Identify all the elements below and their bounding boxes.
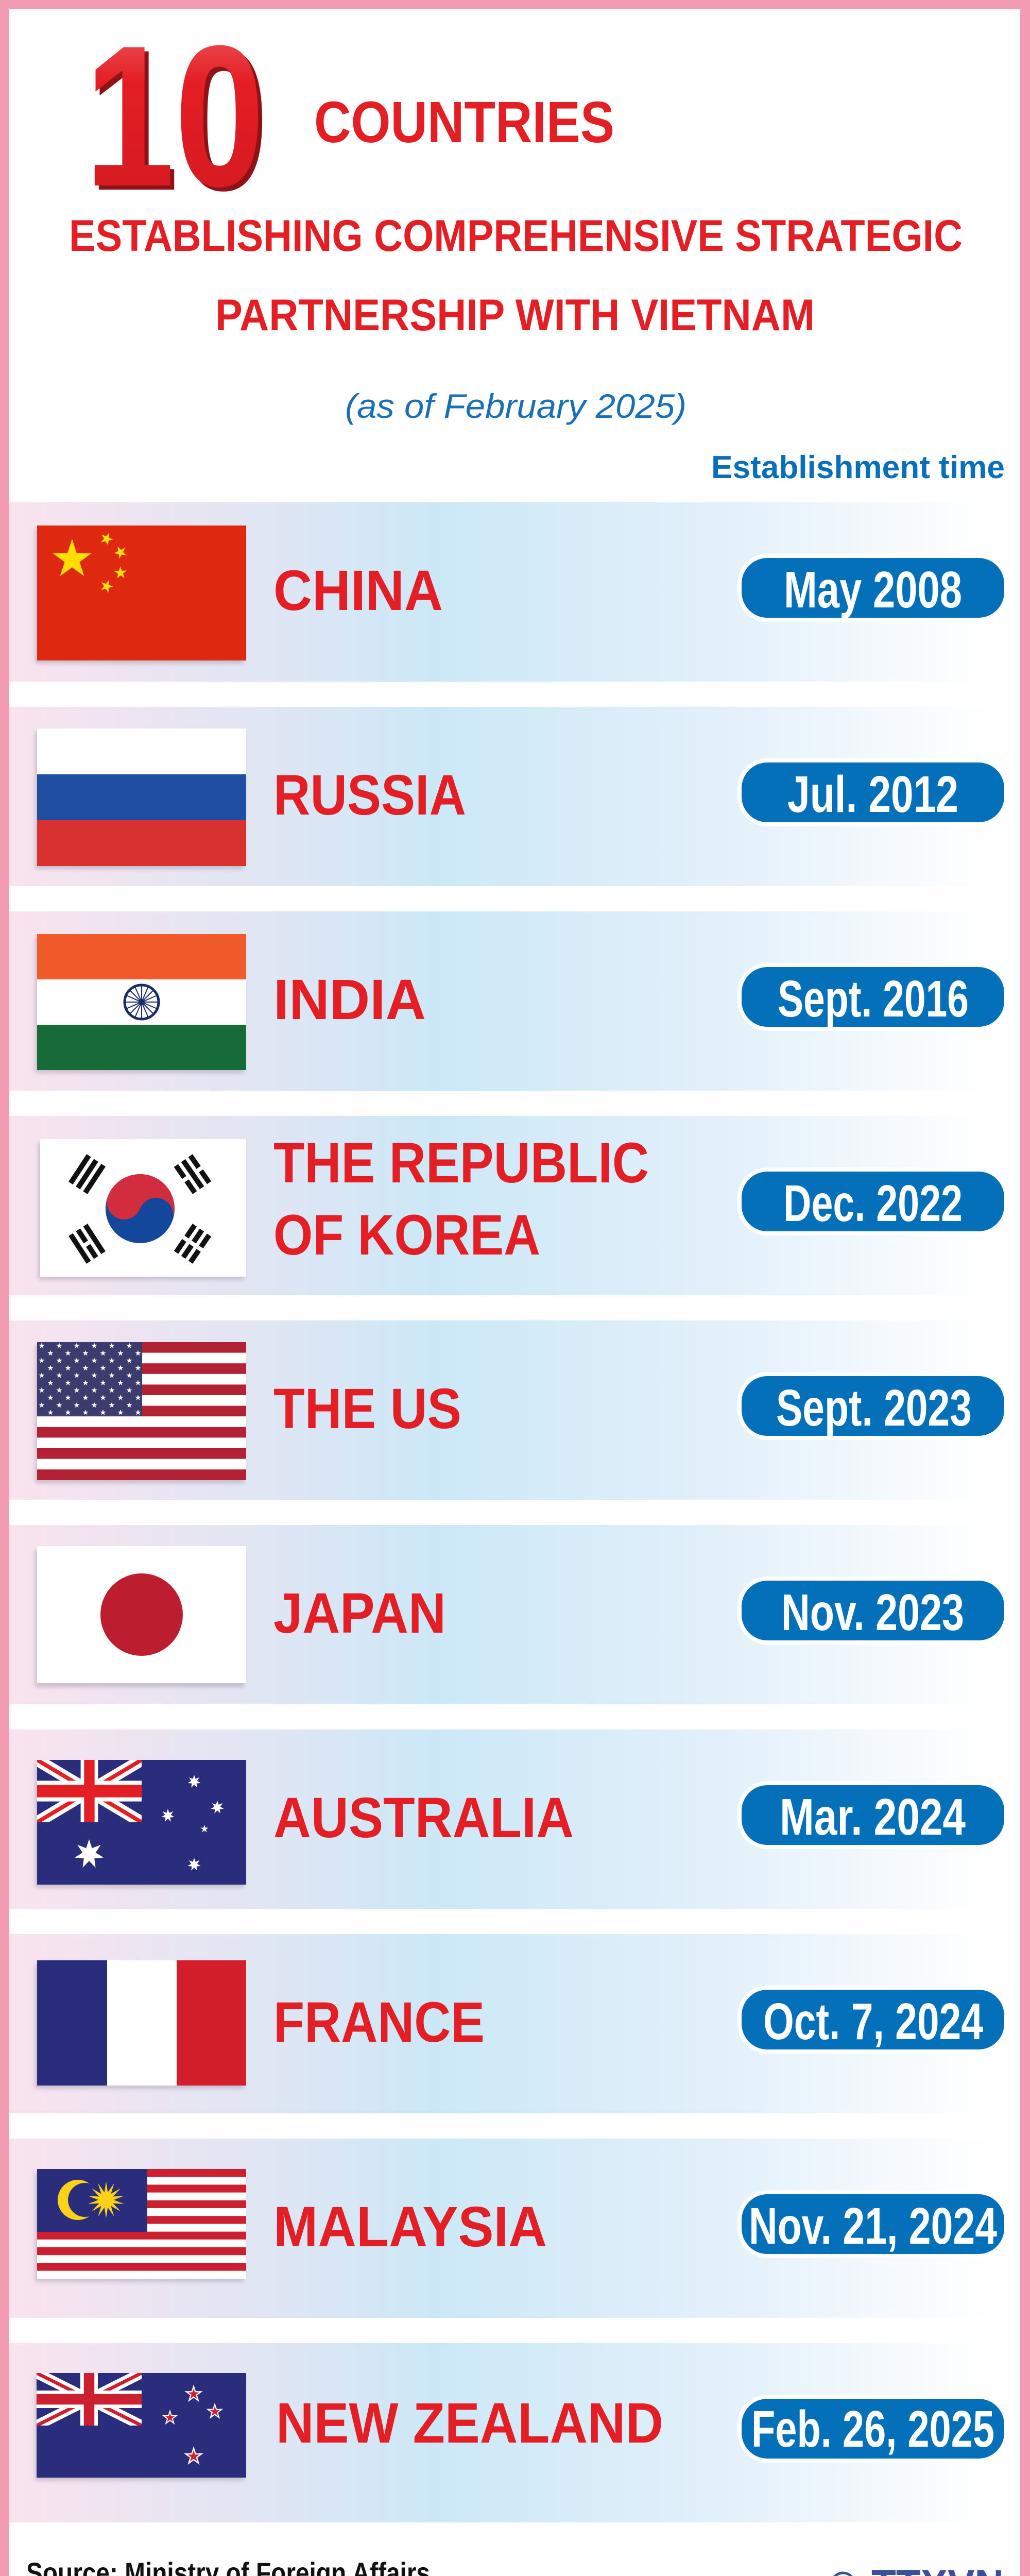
date pill: Sept. 2023 bbox=[776, 1379, 972, 1437]
row 8: France bbox=[37, 1960, 1008, 2086]
row 3: India bbox=[37, 934, 1008, 1070]
date pill bbox=[737, 963, 1008, 1031]
country name: AUSTRALIA bbox=[273, 1786, 574, 1850]
date pill: Mar. 2024 bbox=[780, 1788, 966, 1846]
subtitle date: (as of February 2025) bbox=[345, 387, 686, 425]
country name: CHINA bbox=[273, 559, 443, 622]
date pill: Sept. 2016 bbox=[778, 970, 969, 1028]
flag shadows bbox=[35, 529, 244, 2481]
column header: Establishment time: Establishment time bbox=[711, 450, 1005, 485]
flag: Australia bbox=[37, 1760, 246, 1885]
date pill: Jul. 2012 bbox=[787, 766, 958, 823]
country name: THE US bbox=[273, 1377, 461, 1440]
country name: THE REPUBLIC bbox=[273, 1131, 649, 1195]
date pill bbox=[737, 554, 1008, 622]
date pill bbox=[737, 758, 1008, 826]
flag: India bbox=[37, 934, 246, 1070]
title line 3: PARTNERSHIP WITH VIETNAM bbox=[215, 291, 815, 340]
row 7: Australia bbox=[37, 1760, 1008, 1885]
row backgrounds bbox=[9, 502, 1020, 2522]
flag: Japan bbox=[37, 1546, 246, 1683]
flag: New Zealand bbox=[37, 2373, 246, 2478]
row 4: Korea bbox=[40, 1131, 1008, 1277]
flag: US bbox=[37, 1342, 246, 1480]
country name: OF KOREA bbox=[273, 1204, 540, 1267]
big number 10: 10 bbox=[89, 8, 269, 232]
flag: Malaysia bbox=[37, 2169, 246, 2279]
date pill bbox=[737, 1372, 1008, 1440]
country name: MALAYSIA bbox=[273, 2195, 547, 2259]
date pill: May 2008 bbox=[784, 561, 962, 619]
row 6: Japan bbox=[37, 1546, 1008, 1683]
row 10: New Zealand bbox=[37, 2373, 1008, 2478]
big number 10: 10 bbox=[84, 4, 265, 228]
date pill: Nov. 2023 bbox=[781, 1584, 964, 1641]
country name: NEW ZEALAND bbox=[276, 2392, 663, 2455]
country name: INDIA bbox=[273, 968, 426, 1031]
country name: FRANCE bbox=[273, 1991, 485, 2054]
row 5: US bbox=[37, 1342, 1008, 1480]
row 2: Russia bbox=[37, 728, 1008, 866]
row 1: China bbox=[37, 526, 1008, 660]
flag: Russia bbox=[37, 728, 246, 866]
title: COUNTRIES: COUNTRIES bbox=[314, 90, 614, 155]
flag: China bbox=[37, 526, 246, 660]
date pill bbox=[737, 1577, 1008, 1645]
date pill bbox=[737, 1167, 1008, 1235]
row 9: Malaysia bbox=[37, 2169, 1008, 2279]
flag: France bbox=[37, 1960, 246, 2086]
country name bbox=[273, 1131, 649, 1267]
country name: JAPAN bbox=[273, 1582, 446, 1645]
country name: RUSSIA bbox=[273, 764, 466, 827]
flag: Korea bbox=[40, 1139, 246, 1277]
date pill: Dec. 2022 bbox=[783, 1175, 963, 1232]
